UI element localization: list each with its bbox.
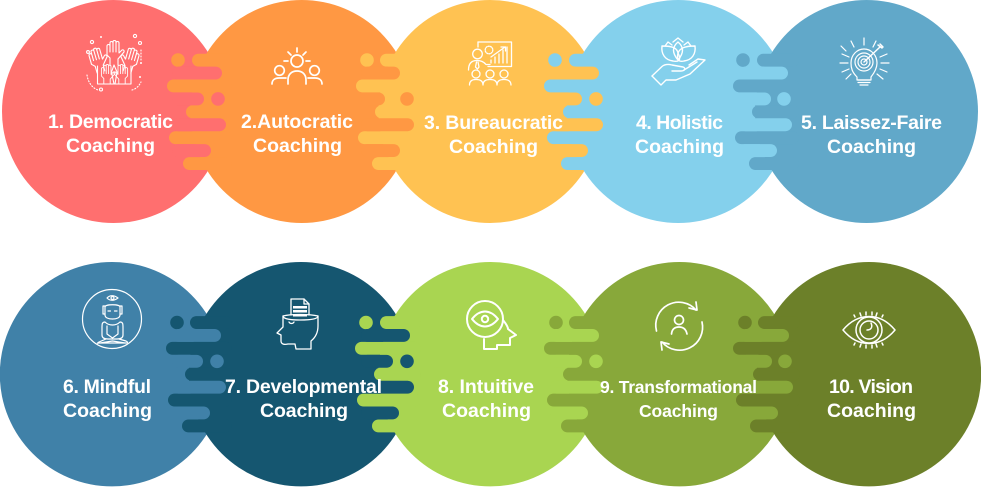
connector: bureaucratic to holistic xyxy=(544,53,610,170)
icon: eye in head xyxy=(467,301,516,349)
circle: autocratic xyxy=(190,0,413,223)
label: 10. Vision Coaching xyxy=(827,376,916,422)
label: 1. Democratic Coaching xyxy=(48,111,173,157)
icon: team with sun xyxy=(272,48,322,84)
label: 8. Intuitive Coaching: Coaching xyxy=(442,400,531,422)
circle: transformational xyxy=(567,262,792,486)
label: 2.Autocratic Coaching xyxy=(241,111,353,157)
label: 2.Autocratic Coaching: 2.Autocratic xyxy=(241,111,353,133)
circle: laissez-faire xyxy=(755,0,978,223)
label: 10. Vision Coaching: 10. Vision xyxy=(829,376,913,398)
label: 3. Bureaucratic Coaching: 3. Bureaucratic xyxy=(424,112,563,134)
label: 5. Laissez-Faire Coaching: 5. Laissez-Faire xyxy=(801,112,942,134)
label: 9. Transformational Coaching: 9. Transformational xyxy=(600,377,757,397)
circle: bureaucratic xyxy=(378,0,602,223)
circle: mindful xyxy=(0,262,224,486)
label: 4. Holistic Coaching: Coaching xyxy=(635,136,724,158)
connector: intuitive to transformational xyxy=(544,316,610,432)
label: 1. Democratic Coaching: 1. Democratic xyxy=(48,111,173,133)
label: 2.Autocratic Coaching: Coaching xyxy=(253,135,342,157)
icon: target light bulb xyxy=(840,38,889,85)
label: 1. Democratic Coaching: Coaching xyxy=(66,135,155,157)
label: 6. Mindful Coaching xyxy=(63,376,152,422)
label: 5. Laissez-Faire Coaching: Coaching xyxy=(827,136,916,158)
label: 7. Developmental Coaching xyxy=(225,376,382,422)
icon: meditating figure xyxy=(82,290,142,348)
icon: raised hands xyxy=(87,34,142,91)
label: 10. Vision Coaching: Coaching xyxy=(827,400,916,422)
circle: holistic xyxy=(567,0,790,223)
icon: eye xyxy=(843,312,895,348)
label: 6. Mindful Coaching: 6. Mindful xyxy=(63,376,151,398)
connector: democratic to autocratic xyxy=(167,53,232,170)
label: 7. Developmental Coaching: Coaching xyxy=(260,400,348,422)
circle: vision xyxy=(757,262,981,486)
label: 7. Developmental Coaching: 7. Developmental xyxy=(225,376,382,398)
label: 9. Transformational Coaching xyxy=(600,377,757,421)
label: 3. Bureaucratic Coaching: Coaching xyxy=(449,136,538,158)
circle: democratic xyxy=(2,0,225,223)
label: 9. Transformational Coaching: Coaching xyxy=(639,401,718,421)
connector: mindful to developmental xyxy=(166,316,232,432)
connector: transformational to vision xyxy=(733,316,800,432)
connector: developmental to intuitive xyxy=(355,316,421,432)
icon: head with document xyxy=(277,299,318,349)
circle: developmental xyxy=(189,262,413,486)
icon: lotus in hand xyxy=(652,38,705,85)
label: 6. Mindful Coaching: Coaching xyxy=(63,400,152,422)
label: 4. Holistic Coaching: 4. Holistic xyxy=(636,112,723,134)
label: 8. Intuitive Coaching xyxy=(438,376,534,422)
label: 4. Holistic Coaching xyxy=(635,112,724,158)
label: 3. Bureaucratic Coaching xyxy=(424,112,563,158)
icon: presenter and audience xyxy=(468,42,512,85)
icon: person with cycle arrows xyxy=(656,302,703,350)
connector: holistic to laissez-faire xyxy=(733,53,799,170)
connector: autocratic to bureaucratic xyxy=(356,53,421,170)
label: 5. Laissez-Faire Coaching xyxy=(801,112,942,158)
circle: intuitive xyxy=(378,262,603,486)
label: 8. Intuitive Coaching: 8. Intuitive xyxy=(438,376,534,398)
